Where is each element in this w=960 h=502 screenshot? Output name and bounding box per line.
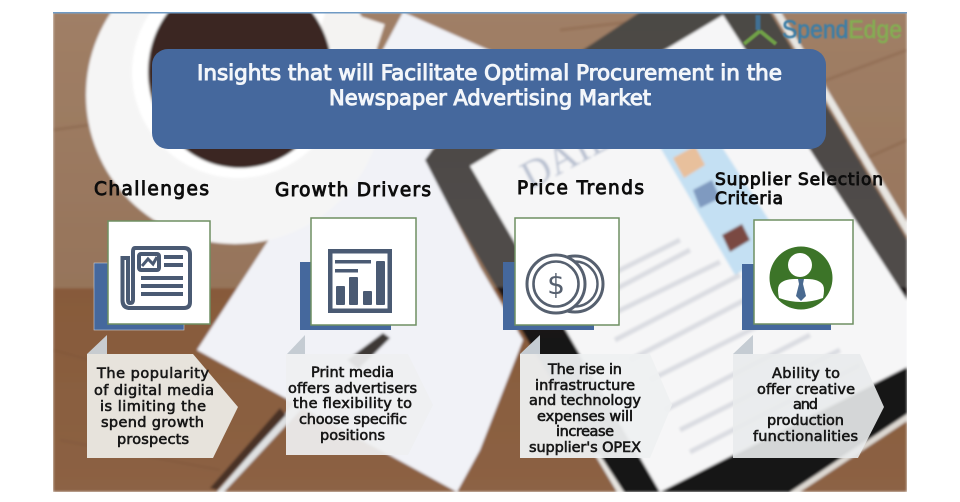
- callout text: Print media: [311, 365, 394, 381]
- card backing: [742, 264, 831, 330]
- panel: price trends: [503, 178, 672, 458]
- card backing: [94, 263, 184, 330]
- heading: price trends: Price Trends: [517, 178, 644, 199]
- callout text: increase: [556, 424, 614, 440]
- icon: coins: [527, 255, 603, 313]
- callout arrow: [286, 354, 433, 455]
- top border line: [53, 12, 907, 14]
- callout fold: [287, 335, 305, 354]
- callout text: and technology: [529, 393, 641, 409]
- card with icon: [754, 220, 853, 324]
- panel: challenges: [87, 179, 238, 458]
- callout text: [288, 365, 417, 444]
- panel: growth drivers: [275, 180, 433, 455]
- logo wordmark: SpendEdge: [782, 16, 902, 44]
- callout text: prospects: [117, 432, 189, 448]
- callout text: of digital media: [94, 383, 214, 399]
- callout text: offer creative: [757, 382, 855, 398]
- heading: challenges: Challenges: [94, 179, 209, 200]
- callout fold: [733, 335, 753, 354]
- callout fold: [87, 335, 107, 354]
- callout text: The rise in: [547, 362, 622, 378]
- panel: supplier selection criteria: [715, 170, 884, 458]
- background photo: desk with coffee, paper, pen and tablet: DAILY: [513, 102, 641, 198]
- card with icon: [515, 218, 619, 325]
- icon: newspaper: [122, 248, 190, 308]
- callout text: The popularity: [96, 366, 209, 382]
- icon: person in circle: [770, 246, 832, 310]
- icon: report chart: [328, 249, 392, 313]
- callout text: positions: [320, 428, 385, 444]
- card with icon: [108, 221, 210, 324]
- callout text: Ability to: [772, 366, 840, 382]
- heading: supplier selection criteria: Criteria: [715, 189, 783, 209]
- heading: growth drivers: Growth Drivers: [275, 180, 431, 201]
- title text: [197, 61, 782, 110]
- callout text: is limiting the: [100, 399, 206, 415]
- callout text: supplier's OPEX: [529, 440, 641, 456]
- icon: logo tripod: [744, 15, 776, 44]
- callout fold: [520, 335, 540, 354]
- callout text: production: [767, 413, 844, 429]
- callout text: offers advertisers: [288, 381, 417, 397]
- heading: supplier selection criteria: Supplier Selection: [715, 170, 883, 190]
- callout text: and: [793, 397, 818, 413]
- callout arrow: [520, 354, 672, 458]
- callout text: choose specific: [299, 412, 407, 428]
- logo: SpendEdge: [744, 15, 902, 44]
- callout text: [94, 366, 214, 448]
- title banner: [152, 49, 826, 149]
- card backing: [300, 262, 391, 330]
- dollar sign: $: [547, 268, 565, 301]
- callout text: infrastructure: [535, 378, 635, 394]
- callout text: [753, 366, 858, 445]
- callout arrow: [733, 354, 884, 458]
- callout text: functionalities: [753, 429, 858, 445]
- heading: supplier selection criteria: [715, 170, 883, 209]
- title text: Insights that will Facilitate Optimal Procurement in the: [197, 61, 782, 85]
- callout text: [529, 362, 641, 456]
- card with icon: [311, 218, 416, 325]
- callout text: spend growth: [101, 415, 204, 431]
- card backing: [503, 262, 594, 330]
- title text: Newspaper Advertising Market: [329, 86, 651, 110]
- callout text: expenses will: [537, 409, 633, 425]
- callout arrow: [87, 354, 238, 458]
- callout text: the flexibility to: [293, 396, 412, 412]
